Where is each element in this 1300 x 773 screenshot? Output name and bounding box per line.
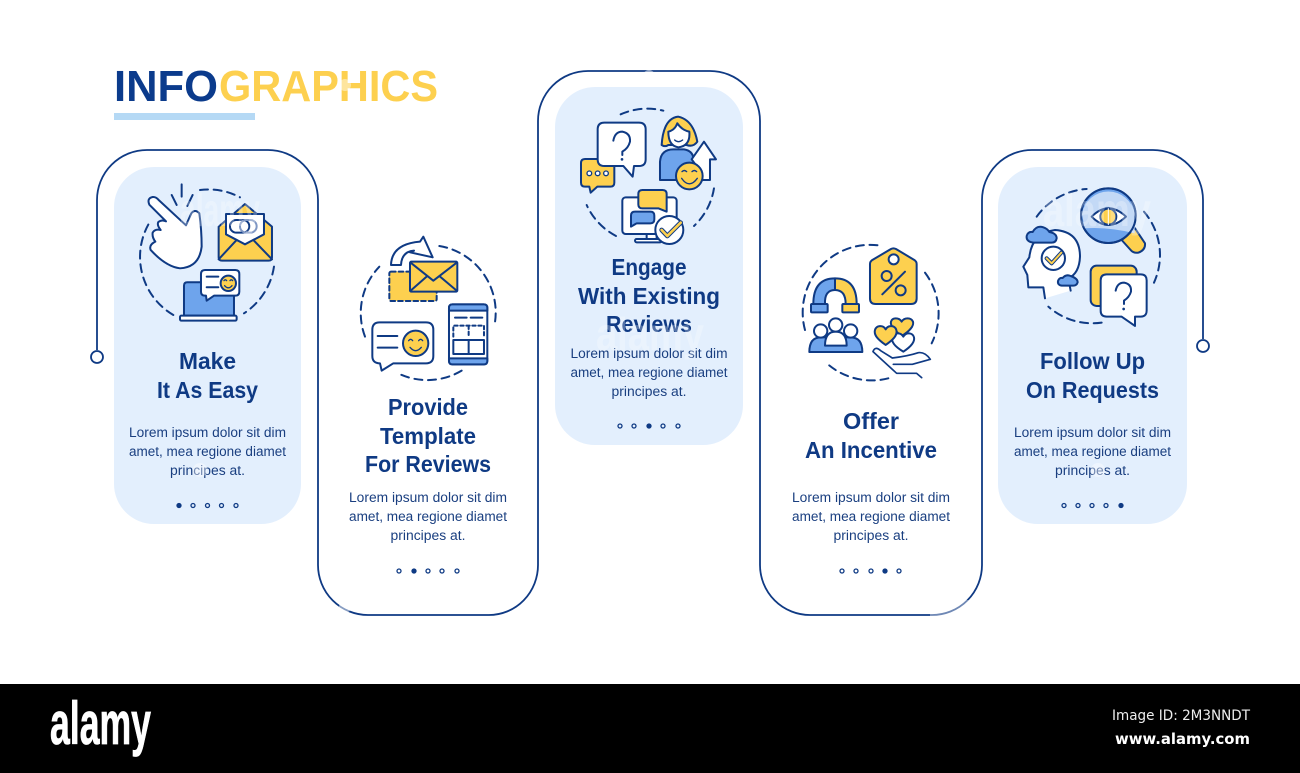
text block: principes at. xyxy=(1055,463,1130,478)
text block xyxy=(129,425,286,478)
title underline xyxy=(114,113,255,120)
text block: amet, mea regione diamet xyxy=(570,365,728,380)
website: www.alamy.com xyxy=(1115,730,1250,748)
title: INFO xyxy=(114,62,218,111)
icon: magnet, price tag, people and hearts xyxy=(803,245,939,380)
text block: principes at. xyxy=(170,463,245,478)
text block: principes at. xyxy=(390,528,466,543)
pagination dots xyxy=(177,504,238,508)
title: GRAPHICS xyxy=(219,62,438,111)
text block: Lorem ipsum dolor sit dim xyxy=(792,490,950,505)
pagination dots xyxy=(618,424,680,428)
heading: Offer xyxy=(843,408,899,434)
heading: On Requests xyxy=(1026,377,1159,403)
heading xyxy=(805,408,937,463)
heading xyxy=(365,394,491,477)
panel: offer an incentive xyxy=(792,245,950,573)
panel: make it as easy xyxy=(129,184,286,508)
heading: Reviews xyxy=(606,311,692,337)
pagination dots xyxy=(1062,504,1123,508)
footer logo: alamy xyxy=(50,690,151,757)
heading: Engage xyxy=(612,254,686,280)
heading: Template xyxy=(380,423,476,449)
panel: provide template xyxy=(349,237,507,573)
text block: Lorem ipsum dolor sit dim xyxy=(570,346,728,361)
panel: engage with existing reviews xyxy=(570,109,728,428)
text block: Lorem ipsum dolor sit dim xyxy=(349,490,507,505)
heading: Make xyxy=(179,348,236,374)
heading: With Existing xyxy=(578,283,720,309)
text block xyxy=(792,490,950,543)
stock photo watermarks: alamy xyxy=(1043,184,1151,236)
text block: amet, mea regione diamet xyxy=(792,509,950,524)
text block: amet, mea regione diamet xyxy=(129,444,286,459)
icon: hand, envelope and laptop xyxy=(140,184,274,321)
heading: Provide xyxy=(388,394,468,420)
title xyxy=(114,62,438,111)
text block: principes at. xyxy=(612,384,686,399)
text block xyxy=(1014,425,1171,478)
text block xyxy=(570,346,728,399)
heading: It As Easy xyxy=(157,377,258,403)
text block: principes at. xyxy=(834,528,908,543)
text block: amet, mea regione diamet xyxy=(1014,444,1171,459)
light panel backgrounds xyxy=(114,87,1187,524)
heading: For Reviews xyxy=(365,451,491,477)
panel: follow up on requests xyxy=(1014,188,1171,508)
heading: An Incentive xyxy=(805,437,937,463)
connecting outline xyxy=(91,71,1209,615)
icon: question bubbles, person and monitor xyxy=(581,109,716,244)
text block xyxy=(349,490,507,543)
text block: amet, mea regione diamet xyxy=(349,509,507,524)
stock photo watermarks: alamy xyxy=(596,308,704,360)
heading xyxy=(578,254,720,337)
heading: Follow Up xyxy=(1040,348,1145,374)
pagination dots xyxy=(397,569,459,573)
heading xyxy=(1026,348,1159,403)
stock photo watermarks xyxy=(180,70,1151,616)
pagination dots xyxy=(840,569,901,573)
icon: envelope, chat and phone template xyxy=(361,237,496,380)
image id: Image ID: 2M3NNDT xyxy=(1112,708,1250,724)
heading xyxy=(157,348,258,403)
text block: Lorem ipsum dolor sit dim xyxy=(1014,425,1171,440)
stock photo watermarks: alamy xyxy=(180,184,260,236)
icon: head, magnifier and question bubbles xyxy=(1023,188,1160,326)
text block: Lorem ipsum dolor sit dim xyxy=(129,425,286,440)
footer band xyxy=(0,684,1300,773)
